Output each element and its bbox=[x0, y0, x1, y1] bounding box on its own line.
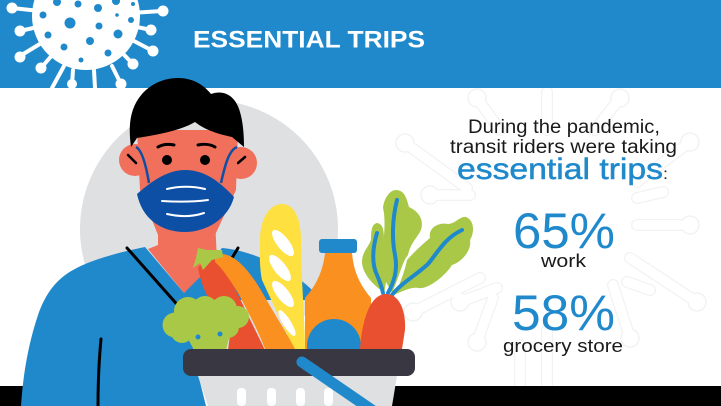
orange vegetable bbox=[215, 254, 295, 349]
header band bbox=[0, 0, 721, 88]
heading: ESSENTIAL TRIPS bbox=[193, 26, 425, 54]
stat: work: 65% bbox=[513, 203, 615, 259]
gray circle backdrop bbox=[80, 100, 338, 358]
stat: work: work bbox=[540, 251, 587, 271]
intro text: During the pandemic, bbox=[468, 117, 660, 138]
stat: grocery store bbox=[503, 285, 623, 356]
collar lines bbox=[98, 248, 238, 406]
neck bbox=[148, 220, 217, 293]
carrot bbox=[360, 294, 405, 349]
beet leaves bbox=[362, 190, 473, 295]
bottom black band bbox=[0, 386, 721, 406]
mask bbox=[137, 170, 234, 232]
ears bbox=[119, 144, 151, 176]
mask straps bbox=[136, 147, 237, 183]
hair bbox=[130, 78, 244, 147]
groceries bbox=[162, 190, 473, 373]
stat: grocery store: grocery store bbox=[503, 336, 623, 356]
intro text: transit riders were taking bbox=[450, 137, 677, 158]
face bbox=[137, 130, 238, 235]
red vegetable bbox=[198, 260, 265, 350]
stat: grocery store: 58% bbox=[512, 285, 615, 341]
shirt bbox=[21, 247, 312, 406]
background virus watermark bbox=[396, 89, 706, 406]
intro text bbox=[450, 117, 677, 158]
person bbox=[21, 78, 312, 406]
bread bbox=[260, 204, 305, 349]
calyx bbox=[193, 248, 223, 270]
icon: virus bbox=[8, 0, 166, 88]
shopping basket bbox=[183, 349, 415, 406]
bottle bbox=[305, 253, 371, 349]
beet stems bbox=[373, 200, 462, 295]
highlighted phrase: essential trips : bbox=[457, 153, 668, 186]
broccoli bbox=[162, 296, 249, 350]
eyes and brows bbox=[162, 155, 210, 165]
